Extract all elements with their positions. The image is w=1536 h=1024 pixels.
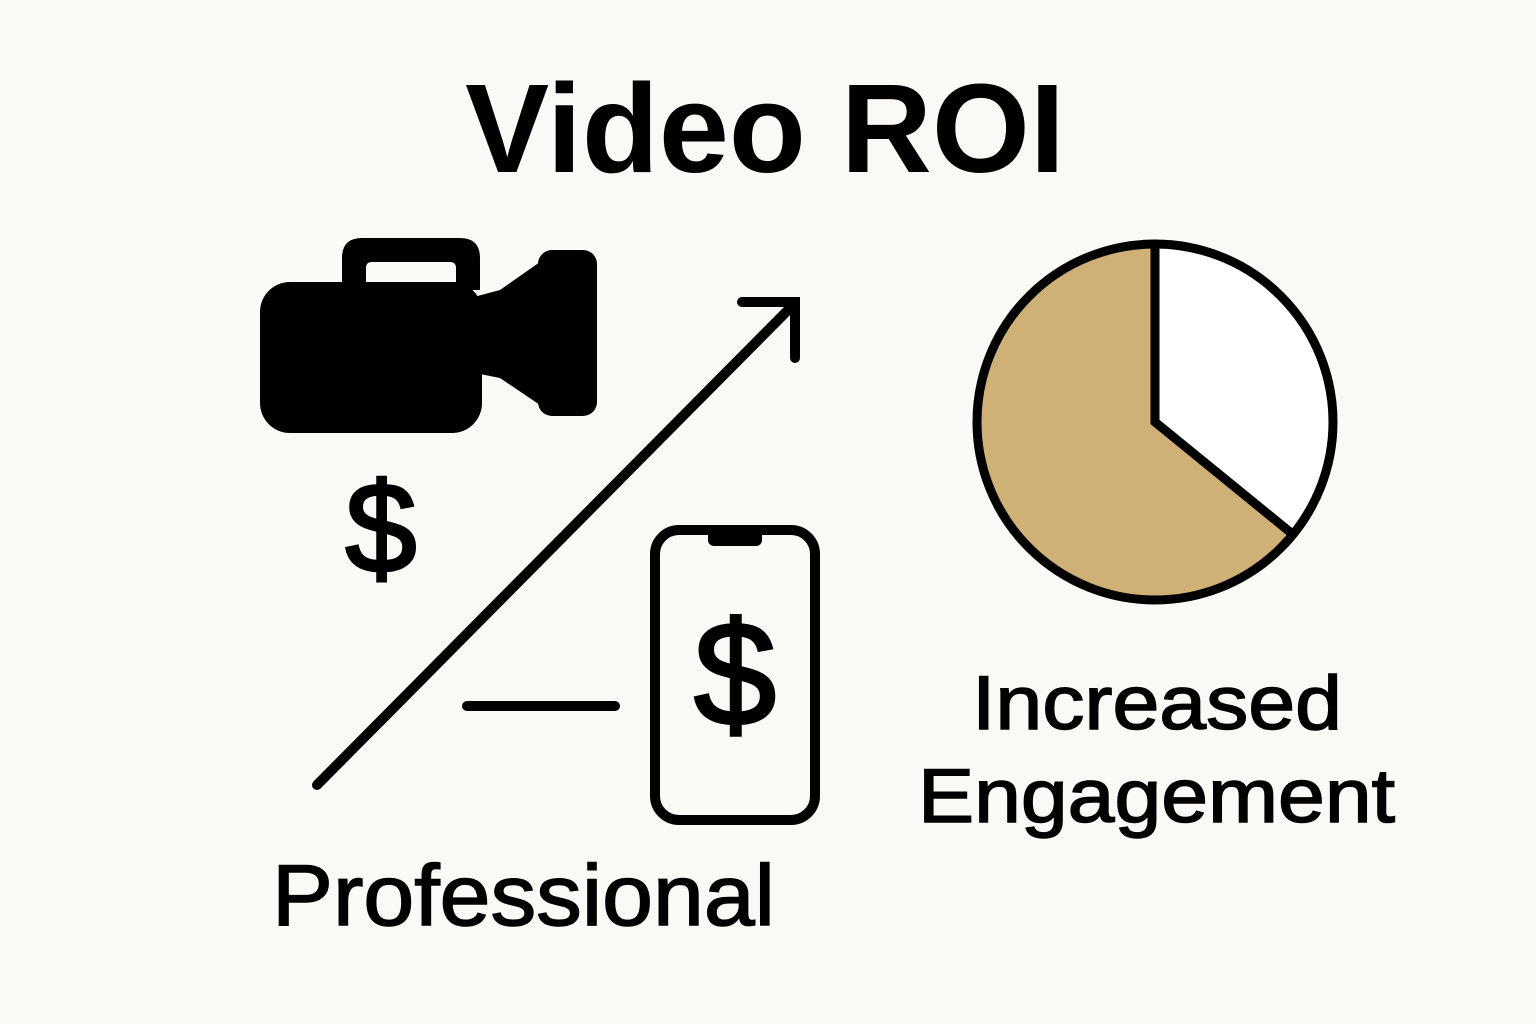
arrow: rising: [317, 302, 795, 785]
icon: dollar sign (camera): $: [345, 457, 417, 600]
icon: dollar sign (phone): $: [694, 592, 776, 757]
icon: video camera: [260, 238, 597, 433]
label: increased engagement: [918, 661, 1395, 839]
dash connector: [467, 701, 615, 711]
pie chart: [977, 244, 1333, 600]
icon: smartphone: [655, 530, 815, 820]
title: Video ROI: [465, 58, 1065, 199]
label: increased engagement: Engagement: [918, 754, 1395, 839]
label: increased engagement: Increased: [972, 661, 1342, 746]
label: professional: Professional: [272, 848, 775, 944]
